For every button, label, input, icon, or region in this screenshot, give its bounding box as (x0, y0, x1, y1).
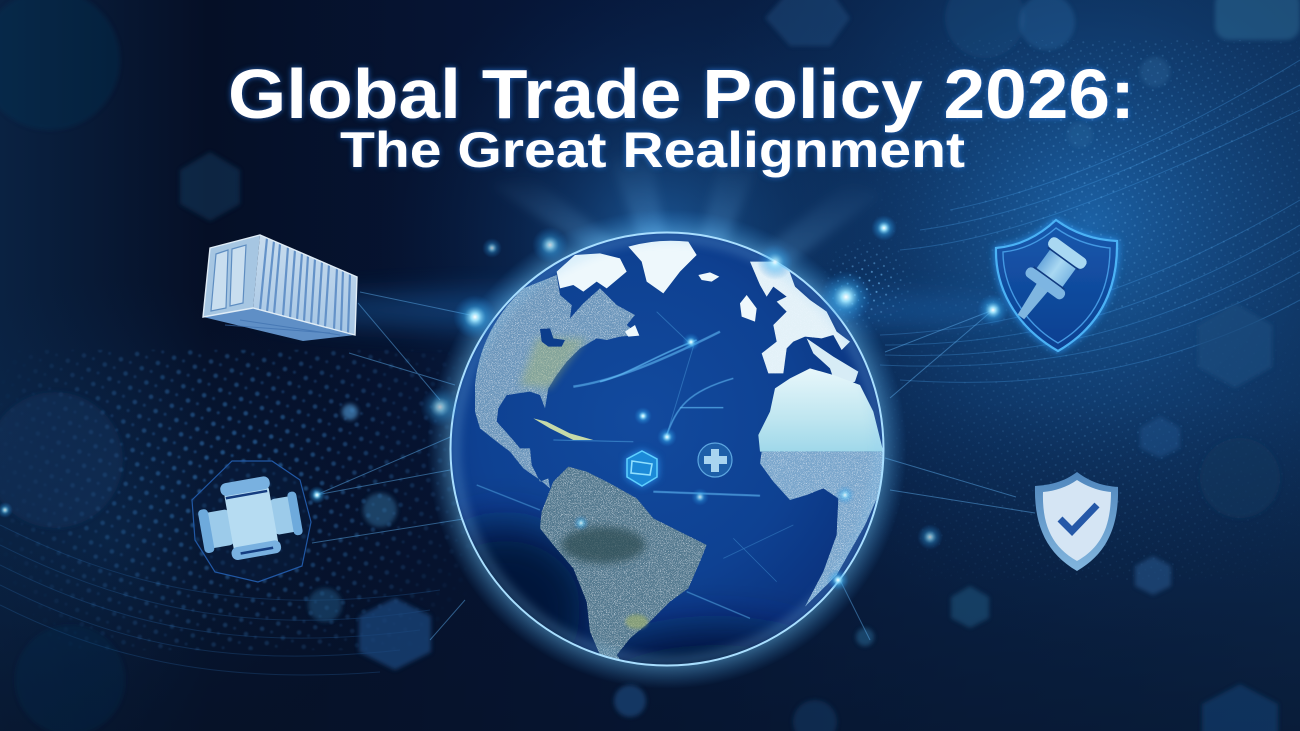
flow lines left (0, 525, 440, 675)
title line 2: The Great Realignment (340, 122, 965, 178)
title (228, 55, 1135, 178)
particle field lower right (906, 304, 1268, 580)
glow stars (0, 215, 1009, 591)
globe rim (450, 232, 884, 666)
sparkle cluster (824, 240, 911, 330)
trade routes (477, 312, 793, 618)
particle field upper right (870, 40, 1300, 310)
icon: shipping container (203, 235, 357, 341)
globe outer glow (427, 209, 907, 689)
dark lower ocean (461, 500, 796, 664)
icon: pipe fitting in circle (192, 461, 311, 582)
globe inner icon: hexagon (627, 451, 657, 486)
connector lines (312, 292, 1035, 640)
globe (415, 209, 907, 730)
particle field left (0, 350, 470, 650)
limb highlight (455, 237, 879, 661)
title line 1: Global Trade Policy 2026: (228, 55, 1135, 133)
continents (475, 241, 883, 662)
icon: gavel shield (996, 220, 1117, 351)
light rays behind globe (490, 150, 880, 275)
globe body (452, 234, 882, 664)
icon: check shield (1035, 472, 1118, 571)
globe inner icon: plus (698, 443, 732, 477)
flow lines right (880, 60, 1300, 382)
